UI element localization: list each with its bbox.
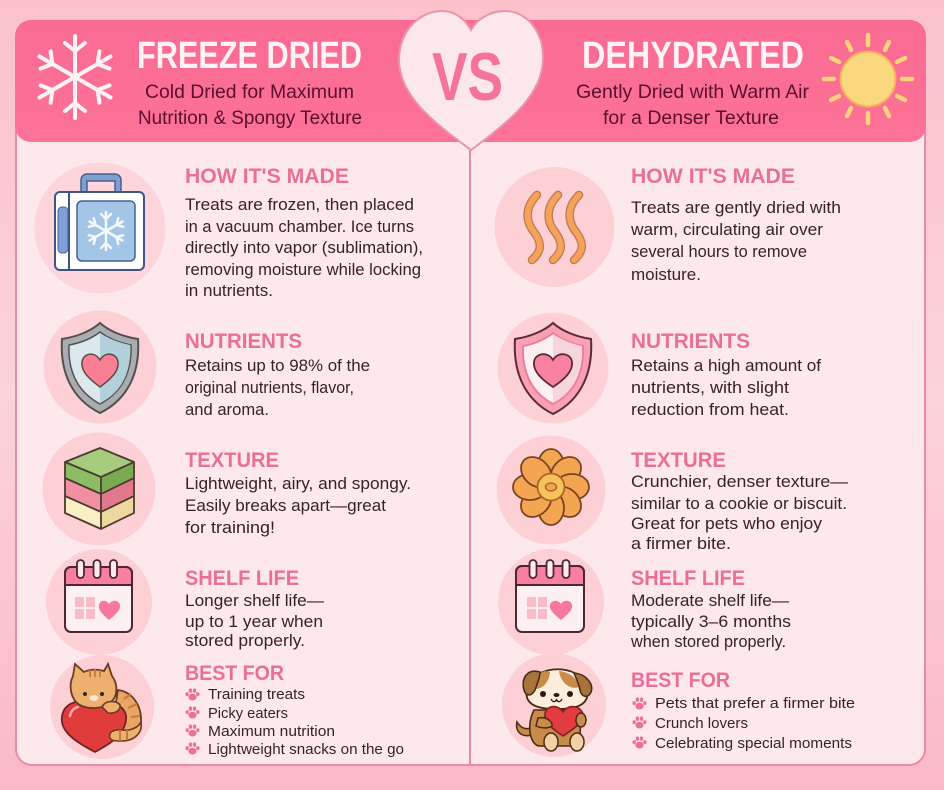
heading: dehydrated: Gently Dried with Warm Air xyxy=(576,81,810,103)
text: how it's made xyxy=(185,165,423,300)
text: nutrients xyxy=(631,330,821,419)
text: best for xyxy=(631,669,855,752)
section: dehydrated nutrients xyxy=(498,312,821,424)
text: best for: BEST FOR xyxy=(631,669,730,692)
bullet list: best for: Picky eaters xyxy=(208,705,288,722)
text: texture xyxy=(631,449,848,553)
text: shelf life: Longer shelf life— xyxy=(185,591,324,610)
icon: flower biscuit xyxy=(496,436,606,544)
text: shelf life xyxy=(185,567,324,650)
text: texture: Crunchier, denser texture— xyxy=(631,472,848,491)
center divider xyxy=(469,141,471,765)
text: texture: Great for pets who enjoy xyxy=(631,514,823,533)
text: nutrients: Retains a high amount of xyxy=(631,356,821,375)
icon: puppy with heart xyxy=(502,653,606,757)
heading: dehydrated xyxy=(576,35,810,129)
icon: snowflake xyxy=(34,36,116,118)
bullet list: best for: Crunch lovers xyxy=(655,715,748,732)
text: nutrients: NUTRIENTS xyxy=(631,330,750,353)
icon: silver shield xyxy=(44,310,156,424)
text: shelf life: SHELF LIFE xyxy=(631,567,745,590)
text: nutrients: and aroma. xyxy=(185,400,269,419)
header band xyxy=(15,20,926,142)
text: nutrients xyxy=(185,330,370,419)
section: dehydrated shelf life xyxy=(498,549,791,655)
text: how it's made: warm, circulating air over xyxy=(630,220,823,239)
heading: dehydrated: for a Denser Texture xyxy=(603,107,779,129)
text: how it's made: directly into vapor (sublimation), xyxy=(185,238,423,257)
text: how it's made: in nutrients. xyxy=(185,281,273,300)
text: shelf life: SHELF LIFE xyxy=(185,567,299,590)
icon: layered treat cube xyxy=(42,432,156,546)
bullet list: best for: Lightweight snacks on the go xyxy=(208,741,404,758)
bullet list: best for: Maximum nutrition xyxy=(208,723,335,740)
text: shelf life: Moderate shelf life— xyxy=(631,591,789,610)
heading: freeze dried xyxy=(137,35,362,129)
section: freeze dried nutrients xyxy=(44,310,370,424)
icon: heat waves xyxy=(494,167,614,287)
text: texture: a firmer bite. xyxy=(631,534,731,553)
text: how it's made: Treats are gently dried with xyxy=(631,198,841,217)
section: freeze dried shelf life xyxy=(46,549,324,655)
text: nutrients: original nutrients, flavor, xyxy=(185,378,354,397)
icon: calendar xyxy=(46,549,152,655)
text: texture xyxy=(185,449,411,537)
text: nutrients: nutrients, with slight xyxy=(631,378,789,397)
text: how it's made: HOW IT'S MADE xyxy=(631,165,795,188)
VS heart badge: VS xyxy=(432,39,503,115)
bullet list: best for xyxy=(632,695,855,752)
text: nutrients: NUTRIENTS xyxy=(185,330,302,353)
text: texture: TEXTURE xyxy=(631,449,726,472)
text: how it's made: in a vacuum chamber. Ice turns xyxy=(185,217,414,236)
bullet list: best for xyxy=(185,686,404,758)
icon: freeze dryer xyxy=(34,162,166,294)
text: best for: BEST FOR xyxy=(185,662,284,685)
text: texture: Easily breaks apart—great xyxy=(185,496,386,515)
text: shelf life xyxy=(630,567,791,651)
text: texture: for training! xyxy=(185,518,275,537)
text: how it's made: removing moisture while locking xyxy=(185,260,421,279)
text: texture: Lightweight, airy, and spongy. xyxy=(185,474,411,493)
VS heart badge xyxy=(399,11,543,150)
text: texture: similar to a cookie or biscuit. xyxy=(631,494,847,513)
bullet list: best for: Celebrating special moments xyxy=(655,735,852,752)
icon: pink shield xyxy=(498,312,608,424)
bullet list: best for: Pets that prefer a firmer bite xyxy=(655,695,855,712)
section: freeze dried best for xyxy=(50,655,404,759)
icon: cat with heart xyxy=(50,655,154,759)
section: dehydrated best for xyxy=(502,653,855,757)
text: texture: TEXTURE xyxy=(185,449,279,472)
text: shelf life: when stored properly. xyxy=(630,632,786,651)
heading: freeze dried: FREEZE DRIED xyxy=(137,35,362,77)
heading: freeze dried: Cold Dried for Maximum xyxy=(145,81,354,103)
section: dehydrated how it's made xyxy=(494,165,841,287)
text: shelf life: up to 1 year when xyxy=(185,612,323,631)
icon: sun xyxy=(824,35,912,123)
text: how it's made: Treats are frozen, then placed xyxy=(185,195,414,214)
text: how it's made: HOW IT'S MADE xyxy=(185,165,349,188)
text: nutrients: reduction from heat. xyxy=(631,400,789,419)
section: freeze dried how it's made xyxy=(34,162,423,300)
text: how it's made xyxy=(630,165,841,284)
text: shelf life: typically 3–6 months xyxy=(631,612,791,631)
text: how it's made: several hours to remove xyxy=(631,242,807,261)
text: nutrients: Retains up to 98% of the xyxy=(185,356,370,375)
text: how it's made: moisture. xyxy=(631,265,701,284)
bullet list: best for: Training treats xyxy=(208,686,305,703)
text: best for xyxy=(185,662,404,758)
icon: calendar xyxy=(498,549,604,655)
heading: freeze dried: Nutrition & Spongy Texture xyxy=(138,107,362,129)
text: shelf life: stored properly. xyxy=(185,631,305,650)
section: freeze dried texture xyxy=(42,432,411,546)
heading: dehydrated: DEHYDRATED xyxy=(582,35,804,77)
section: dehydrated texture xyxy=(496,436,848,553)
